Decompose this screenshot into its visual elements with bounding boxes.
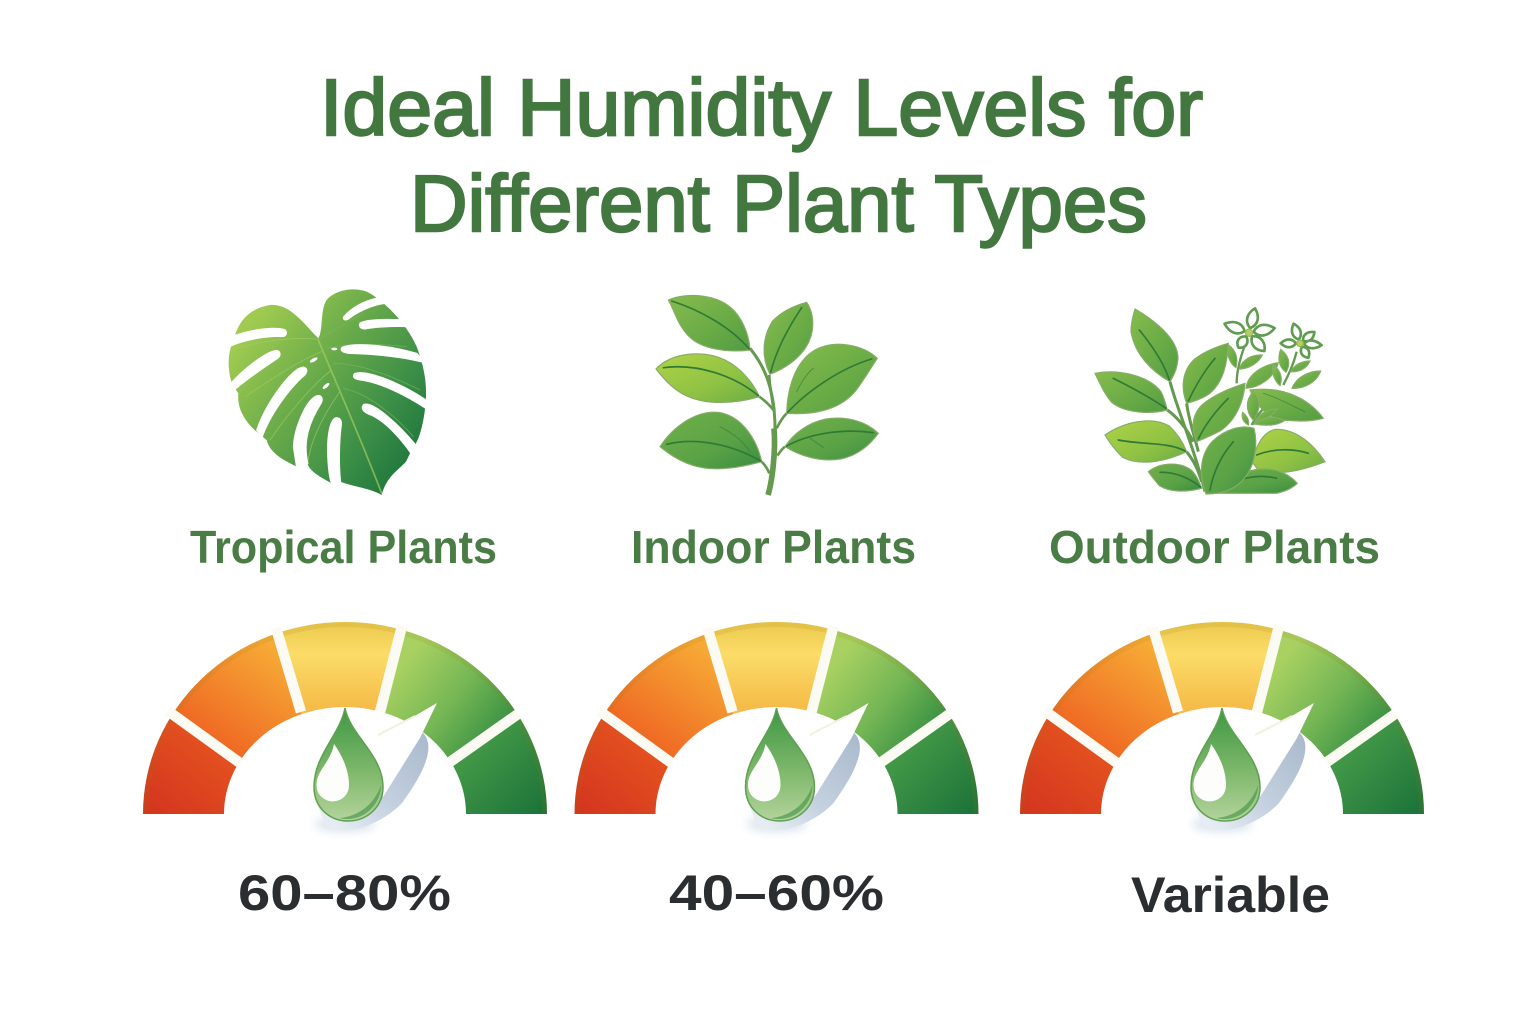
icon: indoor plant sprig — [656, 295, 878, 495]
heading: indoor plants: Indoor Plants — [631, 521, 916, 573]
gauge: indoor — [532, 600, 1032, 831]
value: 40-60%: 40–60% — [669, 865, 884, 921]
panel: indoor plants — [532, 295, 1032, 921]
title: Ideal Humidity Levels for — [320, 63, 1203, 152]
value: variable: Variable — [1131, 867, 1330, 923]
icon: monstera leaf — [229, 289, 427, 495]
gauge band — [100, 600, 600, 814]
value: 60-80%: 60–80% — [238, 865, 451, 921]
icon: water drop — [314, 708, 383, 821]
title — [320, 63, 1203, 248]
gauge band — [532, 600, 1032, 814]
panel: outdoor plants — [977, 307, 1477, 923]
icon: outdoor bush with flowers — [1095, 307, 1325, 494]
icon: water drop — [1191, 708, 1260, 821]
needle — [1192, 703, 1314, 831]
icon: water drop — [746, 708, 814, 821]
panel: tropical plants — [100, 289, 600, 921]
heading: tropical plants: Tropical Plants — [190, 521, 497, 573]
needle — [315, 703, 437, 831]
title: Different Plant Types — [410, 159, 1147, 248]
heading: outdoor plants: Outdoor Plants — [1049, 521, 1380, 573]
gauge: tropical — [100, 600, 600, 831]
gauge: outdoor — [977, 600, 1477, 831]
needle — [746, 703, 868, 831]
gauge band — [977, 600, 1477, 814]
